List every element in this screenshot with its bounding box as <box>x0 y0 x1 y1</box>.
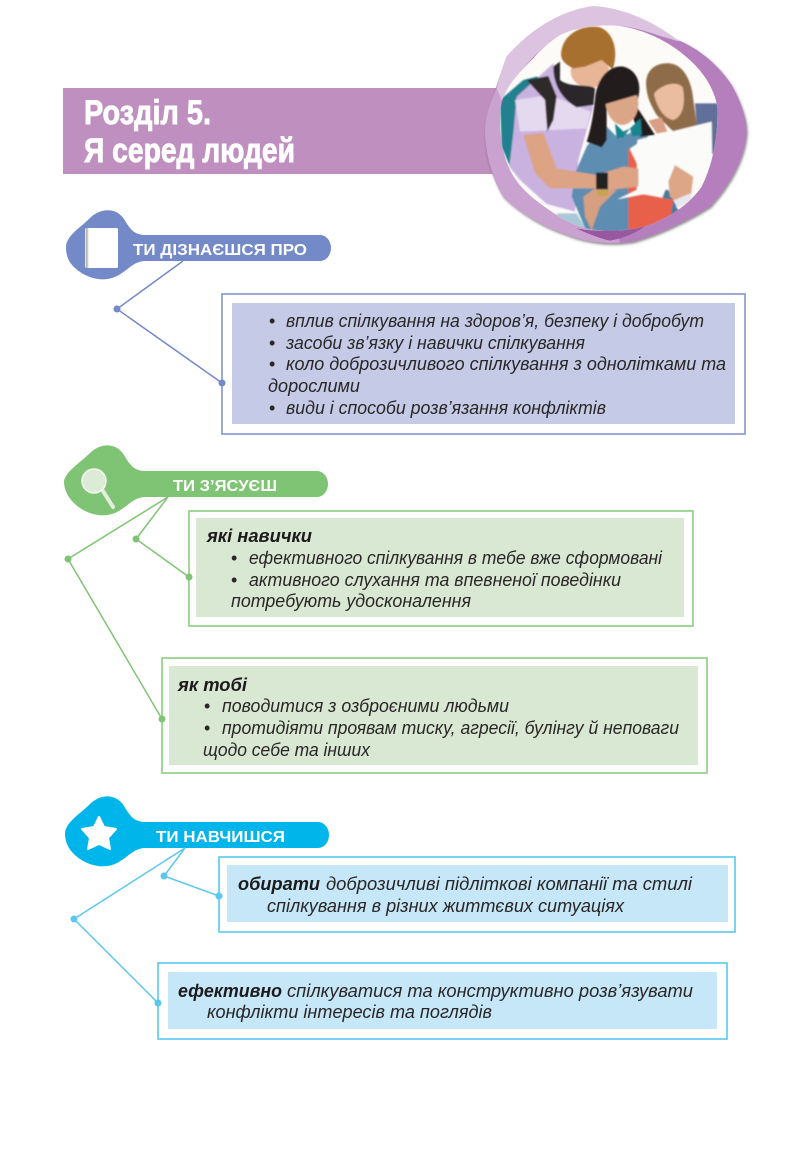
text: how to: поводитися з озброєними людьми <box>222 696 509 716</box>
connector: green <box>64 497 192 722</box>
text: how to: як тобі <box>177 675 248 695</box>
boy arm <box>523 133 638 190</box>
panel: topics <box>222 294 745 434</box>
text: communicate <box>178 981 693 1022</box>
panel: communicate <box>158 963 727 1039</box>
list: topics: дорослими <box>268 376 360 396</box>
girl hair <box>587 67 655 147</box>
list: topics: • <box>269 311 275 331</box>
list: topics: вплив спілкування на здоров’я, безпеку і добробут <box>286 311 704 331</box>
panel: how to <box>162 658 707 773</box>
connector: blue <box>114 261 226 386</box>
icon: magnifier <box>82 469 113 507</box>
list: topics: • <box>269 398 275 418</box>
header text: ТИ ДІЗНАЄШСЯ ПРО <box>133 242 307 259</box>
text: communicate: спілкуватися та конструктивно розв’язувати <box>287 981 693 1001</box>
title text <box>84 94 295 170</box>
text: skills <box>206 526 663 611</box>
title text: Розділ 5. <box>84 94 211 132</box>
red top <box>628 147 673 232</box>
text: how to: протидіяти проявам тиску, агресії, булінгу й неповаги <box>222 718 679 738</box>
list: topics: • <box>269 333 275 353</box>
icon: book <box>85 228 118 268</box>
text: skills: ефективного спілкування в тебе вже сформовані <box>249 548 663 568</box>
text: choose: доброзичливі підліткові компанії та стилі <box>326 874 693 894</box>
boy face and hair <box>571 56 609 88</box>
photo: teenagers with a laptop in a purple frame <box>485 6 747 243</box>
panel: choose <box>219 857 735 932</box>
header text: ТИ НАВЧИШСЯ <box>156 829 285 846</box>
text: skills: • <box>231 548 237 568</box>
list: topics: коло доброзичливого спілкування з однолітками та <box>286 354 726 374</box>
girl jacket <box>572 123 648 232</box>
text: how to: • <box>204 718 210 738</box>
text: skills: • <box>231 570 237 590</box>
header text: ТИ З’ЯСУЄШ <box>173 478 277 495</box>
title text: Я серед людей <box>84 132 295 170</box>
backpack <box>500 76 539 166</box>
list: topics: види і способи розв’язання конфліктів <box>286 398 606 418</box>
header: ти дізнаєшся про <box>66 210 331 279</box>
text: how to: • <box>204 696 210 716</box>
title band <box>63 88 503 174</box>
list: topics <box>268 311 726 418</box>
laptop <box>617 122 712 199</box>
girl forearm <box>583 188 617 230</box>
text: communicate: ефективно <box>178 981 282 1001</box>
list: topics: • <box>269 354 275 374</box>
text: choose: спілкування в різних життєвих ситуаціях <box>267 896 625 916</box>
header: ти навчишся <box>65 796 329 866</box>
text: how to: щодо себе та інших <box>203 740 371 760</box>
list: topics: засоби зв’язку і навички спілкування <box>285 333 585 353</box>
jeans <box>556 212 586 228</box>
third girl <box>646 63 697 132</box>
text: communicate: конфлікти інтересів та поглядів <box>207 1002 492 1022</box>
text: skills: потребують удосконалення <box>231 591 471 611</box>
icon: star <box>82 817 116 849</box>
text: choose: обирати <box>238 874 320 894</box>
connector: cyan <box>70 848 222 1006</box>
boy shirt <box>509 63 593 212</box>
text: skills: активного слухання та впевненої поведінки <box>249 570 621 590</box>
header: ти з'ясуєш <box>64 445 328 515</box>
text: choose <box>238 874 693 916</box>
text: skills: які навички <box>206 526 312 546</box>
panel: skills <box>189 511 693 626</box>
text: how to <box>177 675 679 760</box>
